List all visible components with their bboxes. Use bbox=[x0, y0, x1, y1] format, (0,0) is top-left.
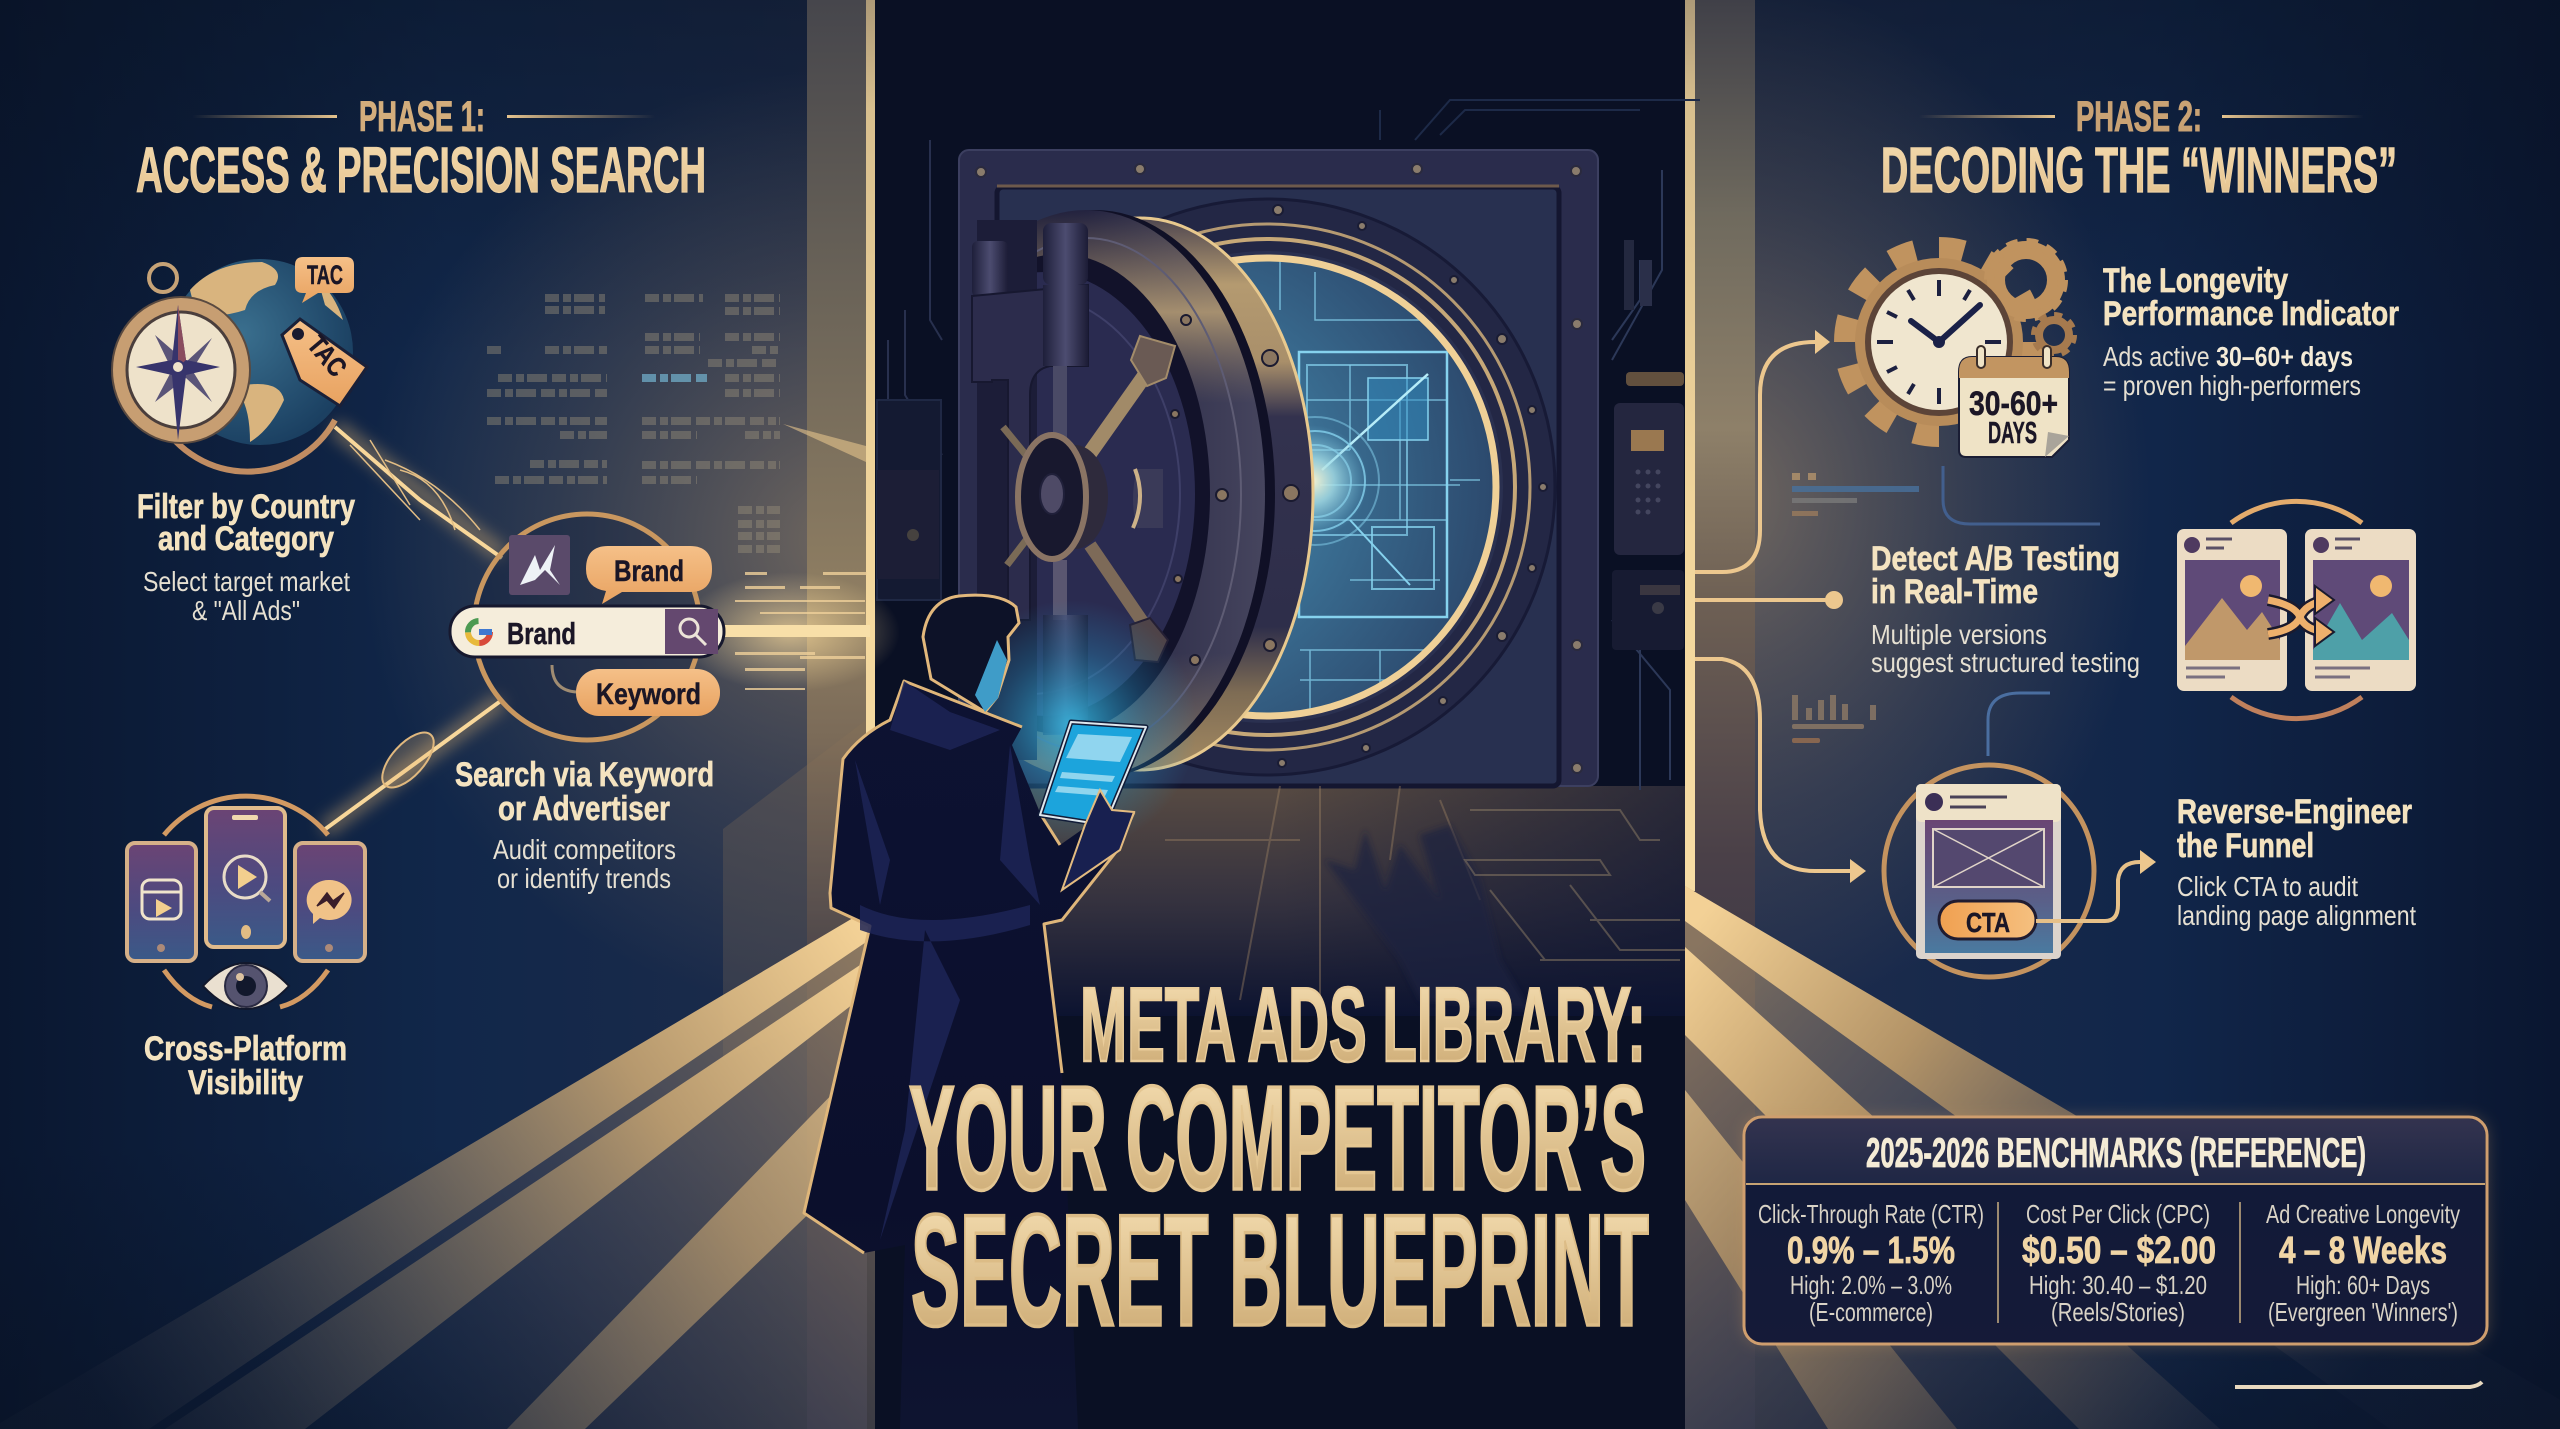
lightning connector: filter to search bbox=[335, 427, 502, 558]
coat bbox=[804, 681, 1134, 1429]
cta button bbox=[1939, 901, 2036, 939]
text: reverse-engineer: the Funnel bbox=[2177, 827, 2314, 865]
heading: phase 1: ACCESS & PRECISION SEARCH bbox=[136, 134, 706, 206]
tag bubble bbox=[295, 257, 354, 303]
text: reverse-engineer: Click CTA to audit bbox=[2177, 871, 2358, 902]
title bbox=[909, 966, 1649, 1359]
text: cross-platform visibility bbox=[144, 1030, 347, 1102]
icon: cta page mockup bbox=[1884, 765, 2156, 977]
blue and decorative connectors bbox=[1792, 466, 2100, 756]
shuffle arrows bbox=[2268, 600, 2326, 634]
benchmark: ctr bbox=[1758, 1199, 1984, 1327]
price tag bbox=[282, 319, 367, 406]
text: reverse-engineer: landing page alignment bbox=[2177, 900, 2416, 931]
tablet glow bbox=[947, 600, 1197, 850]
text: reverse-engineer: Reverse-Engineer bbox=[2177, 793, 2412, 831]
text: search via keyword bbox=[455, 756, 714, 894]
benchmark: ctr: High: 2.0% – 3.0% bbox=[1790, 1270, 1952, 1300]
panel: central vault room bbox=[875, 0, 1685, 1429]
bubble: keyword: Keyword bbox=[596, 678, 701, 711]
text: a/b testing: suggest structured testing bbox=[1871, 647, 2140, 678]
data matrix decoration bbox=[487, 298, 780, 549]
icon: a/b ad cards bbox=[2177, 501, 2416, 719]
benchmark: cpc bbox=[2022, 1199, 2216, 1327]
benchmark: ctr: Click-Through Rate (CTR) bbox=[1758, 1199, 1984, 1229]
text: longevity: Ads active 30–60+ days bbox=[2103, 341, 2353, 372]
benchmark: longevity bbox=[2266, 1199, 2460, 1327]
benchmark: longevity: 4 – 8 Weeks bbox=[2279, 1230, 2447, 1272]
text: cross-platform visibility: Visibility bbox=[188, 1064, 303, 1102]
search bar: Brand bbox=[507, 616, 576, 651]
text: reverse-engineer bbox=[2177, 793, 2416, 931]
light beams: left bbox=[0, 905, 875, 1429]
text: search via keyword: Audit competitors bbox=[493, 834, 676, 865]
text: search via keyword: or Advertiser bbox=[498, 790, 670, 828]
coat folds bbox=[855, 681, 1040, 1240]
benchmark: cpc: (Reels/Stories) bbox=[2051, 1297, 2185, 1327]
benchmark: ctr: 0.9% – 1.5% bbox=[1787, 1230, 1955, 1272]
heading: phase 2 bbox=[1881, 93, 2397, 206]
floor lines and shadow bbox=[1165, 786, 1685, 1010]
bubble: keyword bbox=[552, 665, 720, 716]
blueprint inside vault bbox=[1231, 254, 1500, 720]
text: cross-platform visibility: Cross-Platform bbox=[144, 1030, 347, 1068]
search bar bbox=[450, 606, 724, 657]
vault frame bbox=[959, 150, 1598, 786]
benchmark: longevity: High: 60+ Days bbox=[2296, 1270, 2430, 1300]
text: filter by country: Filter by Country bbox=[137, 488, 355, 526]
bubble: brand: Brand bbox=[614, 555, 684, 588]
bubble: brand bbox=[586, 546, 712, 604]
heading: phase 2: PHASE 2: bbox=[2076, 93, 2202, 141]
benchmark: ctr: (E-commerce) bbox=[1809, 1297, 1933, 1327]
vault door bbox=[971, 210, 1314, 772]
benchmark: longevity: (Evergreen 'Winners') bbox=[2268, 1297, 2458, 1327]
vault opening with rings bbox=[979, 199, 1555, 775]
vault wheel bbox=[1003, 336, 1175, 662]
left side circuitry bbox=[877, 100, 1700, 600]
text: a/b testing: in Real-Time bbox=[1871, 573, 2038, 611]
calendar: DAYS bbox=[1988, 415, 2037, 450]
text: a/b testing bbox=[1871, 540, 2140, 678]
card B bbox=[2305, 529, 2416, 691]
glowing horizontal stream bbox=[680, 572, 900, 692]
calendar bbox=[1959, 346, 2069, 457]
person with tablet bbox=[804, 595, 1197, 1429]
phone: reels bbox=[127, 843, 196, 961]
light beams: right bbox=[1685, 886, 2560, 1429]
icon: search bar cluster bbox=[450, 514, 724, 740]
right doorway wall bbox=[1685, 0, 1755, 1429]
text: filter by country: and Category bbox=[158, 520, 334, 558]
panel: left background bbox=[0, 0, 1320, 1429]
card A bbox=[2177, 529, 2287, 691]
coat outline bbox=[804, 681, 1134, 1253]
tag bubble: TAC bbox=[307, 260, 343, 290]
right side circuitry and keypad bbox=[1612, 170, 1684, 790]
text: search via keyword: or identify trends bbox=[497, 863, 671, 894]
price tag: TAC bbox=[301, 330, 353, 383]
text: a/b testing: Multiple versions bbox=[1871, 619, 2047, 650]
text: filter by country: Select target market bbox=[143, 566, 350, 597]
vault hinges bbox=[972, 223, 1088, 735]
icon: three phones and eye bbox=[127, 796, 365, 1009]
eye bbox=[203, 963, 289, 1009]
connectors: gold flow lines bbox=[1695, 330, 1866, 883]
text: a/b testing: Detect A/B Testing bbox=[1871, 540, 2120, 578]
icon: gears clock and calendar bbox=[1845, 243, 2074, 457]
text: filter by country: & "All Ads" bbox=[192, 595, 300, 626]
text: filter by country bbox=[137, 488, 355, 626]
text: longevity: The Longevity bbox=[2103, 262, 2288, 300]
text: longevity: = proven high-performers bbox=[2103, 370, 2361, 401]
text: YOUR COMPETITOR’S bbox=[909, 1056, 1646, 1221]
title: META ADS LIBRARY: bbox=[1080, 966, 1646, 1084]
tablet bbox=[1040, 722, 1146, 825]
advertiser square bbox=[509, 535, 570, 595]
phone: search video bbox=[206, 808, 285, 947]
cta button: CTA bbox=[1966, 907, 2010, 938]
icon: globe compass and tags bbox=[112, 257, 367, 472]
calendar: 30-60+ bbox=[1969, 385, 2058, 423]
heading: phase 1: PHASE 1: bbox=[359, 93, 485, 141]
benchmark: longevity: Ad Creative Longevity bbox=[2266, 1199, 2460, 1229]
phone: messenger bbox=[295, 843, 365, 961]
heading: phase 1 bbox=[136, 93, 706, 206]
text: longevity bbox=[2103, 262, 2399, 401]
panel: right background bbox=[1310, 0, 2560, 1429]
text: longevity: Performance Indicator bbox=[2103, 295, 2399, 333]
hand bbox=[1062, 790, 1134, 890]
benchmark: cpc: Cost Per Click (CPC) bbox=[2026, 1199, 2210, 1229]
lightning connector: search to platforms bbox=[324, 700, 502, 830]
benchmark: cpc: $0.50 – $2.00 bbox=[2022, 1230, 2216, 1272]
left doorway wall bbox=[723, 0, 875, 1429]
benchmark: cpc: High: 30.40 – $1.20 bbox=[2029, 1270, 2207, 1300]
head bbox=[923, 595, 1019, 712]
panel: benchmarks bbox=[1744, 1117, 2487, 1344]
text: search via keyword: Search via Keyword bbox=[455, 756, 714, 794]
text: SECRET BLUEPRINT bbox=[911, 1181, 1649, 1359]
